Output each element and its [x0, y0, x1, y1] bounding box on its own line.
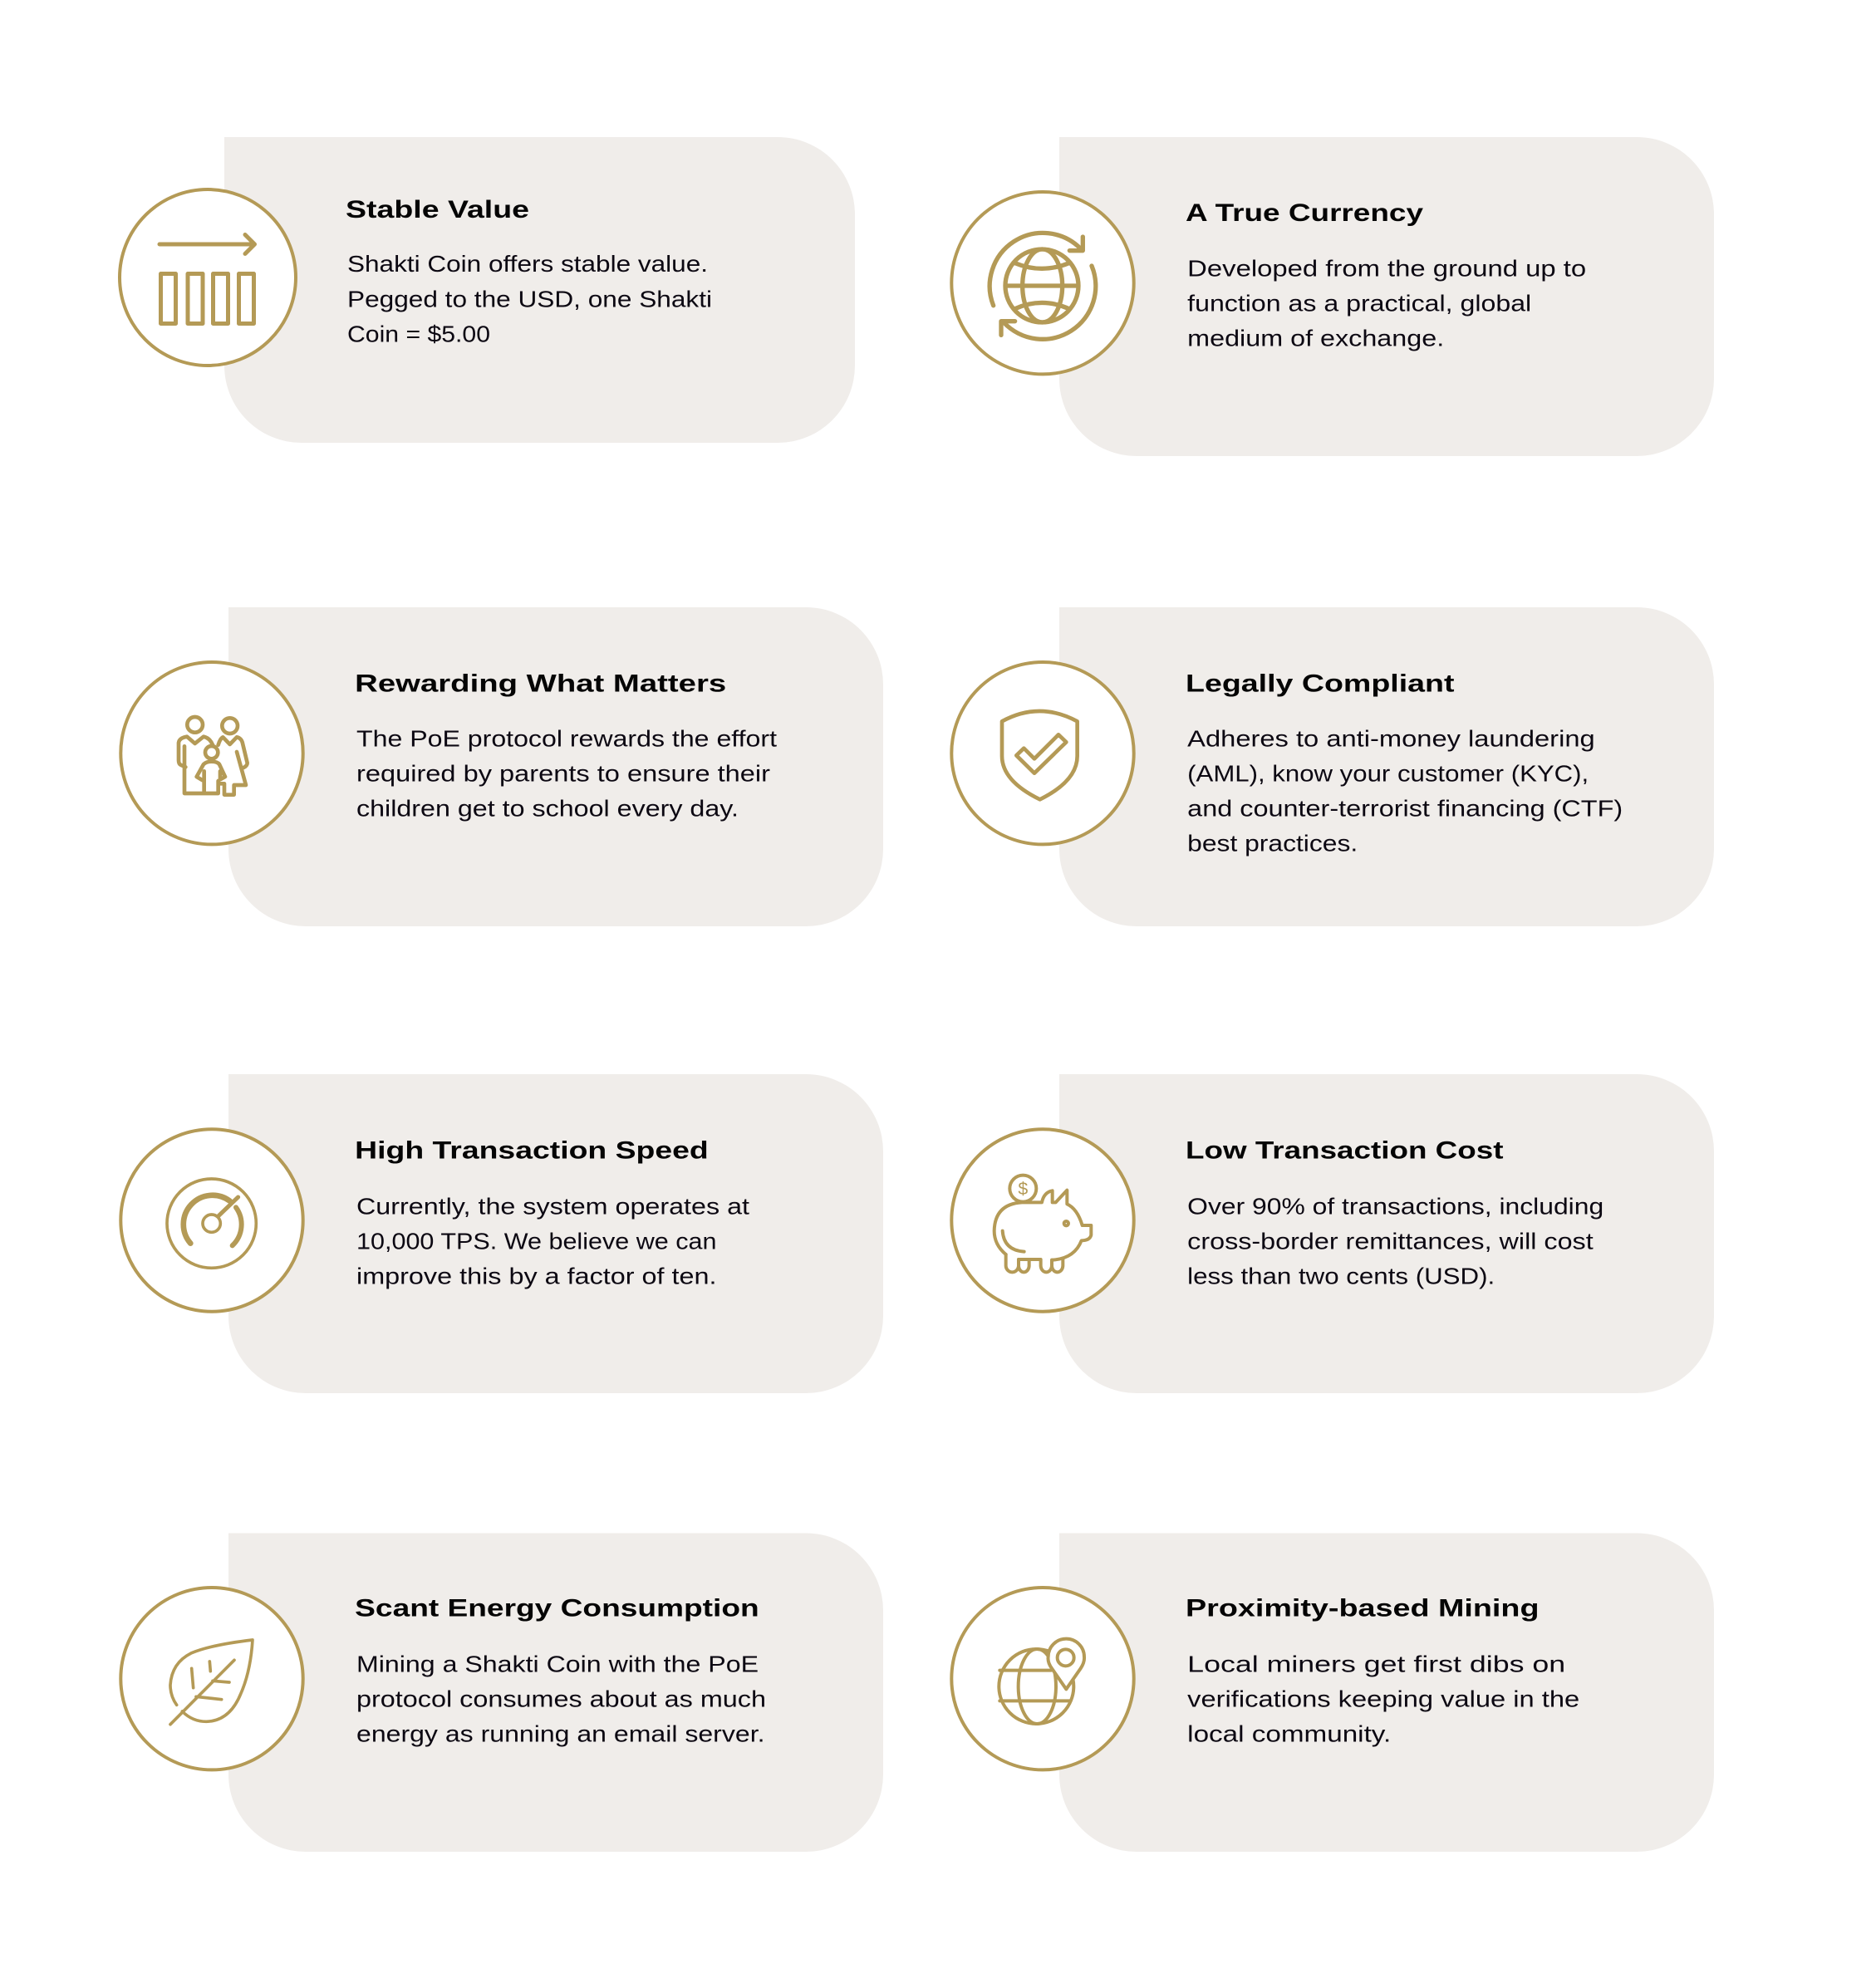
body text: 10,000 TPS. We believe we can: [356, 1228, 716, 1254]
body text: children get to school every day.: [356, 795, 739, 821]
icon circle: [951, 1588, 1134, 1770]
body text: best practices.: [1187, 830, 1358, 856]
panel: Proximity-based Mining: [951, 1534, 1714, 1852]
body text: Local miners get first dibs on: [1187, 1652, 1565, 1677]
card background: [228, 607, 883, 926]
body text: Currently, the system operates at: [356, 1193, 749, 1219]
body text: and counter-terrorist financing (CTF): [1187, 795, 1623, 821]
icon: piggy bank with coin: [994, 1176, 1091, 1272]
body text: [347, 251, 712, 347]
heading: Proximity-based Mining: [1186, 1595, 1539, 1622]
icon circle: [951, 192, 1134, 374]
body text: [356, 1193, 749, 1289]
icon: leaf: [170, 1640, 253, 1725]
panel: Low Transaction Cost: [951, 1074, 1714, 1393]
body text: [1187, 725, 1623, 856]
body text: (AML), know your customer (KYC),: [1187, 760, 1589, 786]
panel: Rewarding What Matters: [120, 607, 883, 926]
body text: [356, 725, 777, 821]
body text: Pegged to the USD, one Shakti: [347, 286, 712, 312]
body text: Shakti Coin offers stable value.: [347, 251, 708, 277]
heading: Stable Value: [346, 196, 529, 223]
body text: Developed from the ground up to: [1187, 256, 1586, 282]
body text: medium of exchange.: [1187, 326, 1444, 351]
body text: less than two cents (USD).: [1187, 1263, 1495, 1289]
card background: [1059, 137, 1714, 456]
card background: [228, 1074, 883, 1393]
body text: Adheres to anti-money laundering: [1187, 725, 1595, 751]
heading: Rewarding What Matters: [355, 670, 726, 698]
body text: verifications keeping value in the: [1187, 1686, 1579, 1712]
icon: globe with circular arrows: [990, 233, 1096, 339]
icon circle: [951, 662, 1134, 844]
icon: speedometer: [167, 1179, 256, 1268]
icon: shield with check: [1002, 711, 1078, 799]
card background: [228, 1534, 883, 1852]
body text: protocol consumes about as much: [356, 1686, 766, 1712]
panel: Stable Value: [120, 137, 855, 443]
body text: [1187, 1193, 1603, 1289]
card background: [224, 137, 855, 443]
icon circle: [951, 1129, 1134, 1312]
icon circle: [120, 662, 303, 844]
panel: A True Currency: [951, 137, 1714, 456]
icon: piggy bank with coin: $: [1018, 1179, 1028, 1199]
icon: family: [179, 717, 248, 795]
panel: Legally Compliant: [951, 607, 1714, 926]
heading: Low Transaction Cost: [1186, 1136, 1504, 1165]
card background: [1059, 1074, 1714, 1393]
body text: improve this by a factor of ten.: [356, 1263, 716, 1289]
icon: globe with location pin: [999, 1639, 1084, 1724]
body text: [1187, 256, 1586, 351]
body text: Over 90% of transactions, including: [1187, 1193, 1603, 1219]
heading: A True Currency: [1186, 199, 1423, 227]
body text: Mining a Shakti Coin with the PoE: [356, 1652, 759, 1677]
body text: required by parents to ensure their: [356, 760, 770, 786]
icon circle: [120, 189, 296, 366]
heading: Legally Compliant: [1186, 670, 1455, 698]
heading: High Transaction Speed: [355, 1136, 709, 1165]
panel: High Transaction Speed: [120, 1074, 883, 1393]
icon: arrow over four bars: [160, 234, 254, 324]
body text: The PoE protocol rewards the effort: [356, 725, 777, 751]
body text: function as a practical, global: [1187, 291, 1531, 317]
card background: [1059, 607, 1714, 926]
icon circle: [120, 1588, 303, 1770]
body text: local community.: [1187, 1721, 1391, 1747]
body text: [1187, 1652, 1579, 1747]
card background: [1059, 1534, 1714, 1852]
icon circle: [120, 1129, 303, 1312]
body text: cross-border remittances, will cost: [1187, 1228, 1594, 1254]
body text: Coin = $5.00: [347, 322, 490, 347]
heading: Scant Energy Consumption: [355, 1595, 759, 1622]
panel: Scant Energy Consumption: [120, 1534, 883, 1852]
body text: energy as running an email server.: [356, 1721, 764, 1747]
body text: [356, 1652, 766, 1747]
